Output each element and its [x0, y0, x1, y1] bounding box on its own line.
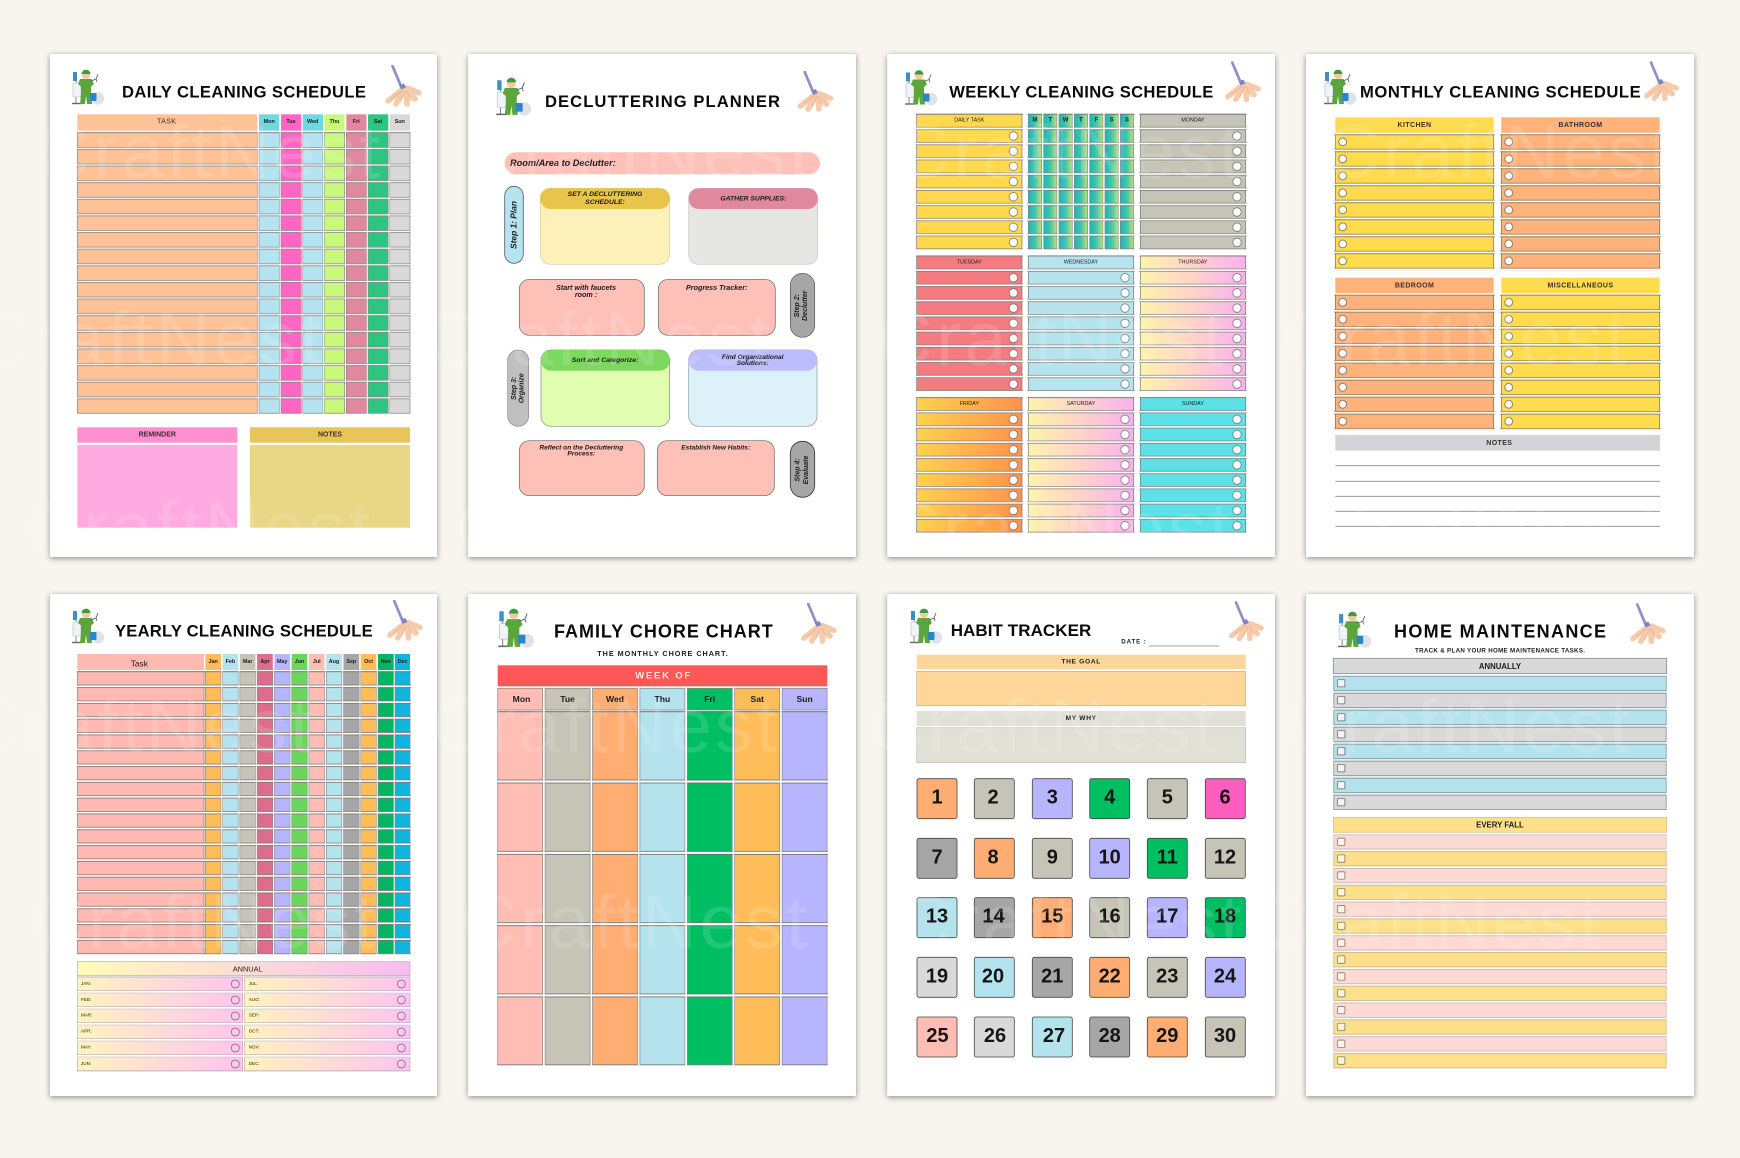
- monday column: [1139, 114, 1247, 250]
- title: home maintenance: HOME MAINTENANCE: [1394, 621, 1606, 641]
- habit day squares: 24: [1214, 965, 1237, 987]
- tuesday column: [916, 256, 1023, 392]
- habit day squares: 7: [931, 846, 943, 868]
- habit day squares: 13: [926, 906, 948, 928]
- task table: Wed: [307, 119, 318, 125]
- habit day squares: 23: [1156, 965, 1178, 987]
- watermark: CraftNest: [1255, 880, 1603, 965]
- date field: [1121, 638, 1219, 646]
- box: establish new habits: Establish New Habits:: [681, 444, 750, 451]
- annual checklist: JUL:: [249, 981, 258, 986]
- panel: decluttering planner: [468, 54, 856, 557]
- yearly task table: Jul: [313, 659, 321, 665]
- wednesday column: WEDNESDAY: [1064, 259, 1098, 265]
- annually checklist: [1333, 658, 1667, 810]
- icon: feather duster: [800, 72, 831, 109]
- thursday column: [1139, 256, 1247, 392]
- icon: cleaner mascot: [1338, 612, 1371, 648]
- notes box: NOTES: [318, 432, 342, 439]
- sunday column: SUNDAY: [1182, 401, 1204, 407]
- my why box: [917, 711, 1246, 763]
- yearly task table: Apr: [260, 659, 271, 665]
- box: reflect on the decluttering process: Process:: [567, 450, 595, 458]
- icon: cleaner mascot: [496, 78, 531, 116]
- chore grid: Mon: [513, 694, 530, 704]
- tuesday column: TUESDAY: [957, 259, 982, 265]
- annual checklist: MAY:: [81, 1045, 92, 1050]
- every fall checklist: [1333, 817, 1667, 1069]
- weekday check grid: W: [1063, 118, 1069, 124]
- chore grid: Sun: [796, 694, 813, 704]
- date field: DATE :: [1121, 638, 1146, 646]
- watermark: CraftNest: [432, 684, 780, 769]
- weekday check grid: M: [1032, 118, 1037, 124]
- watermark: CraftNest: [870, 684, 1218, 769]
- friday column: [916, 397, 1023, 534]
- panel: daily cleaning schedule: [50, 54, 437, 557]
- box: reflect on the decluttering process: Reflect on the Decluttering: [539, 444, 623, 451]
- habit day squares: 30: [1214, 1025, 1236, 1047]
- watermark: CraftNest: [465, 110, 813, 195]
- saturday column: SATURDAY: [1067, 401, 1096, 407]
- wednesday column: [1027, 256, 1135, 392]
- kitchen list: KITCHEN: [1398, 122, 1431, 129]
- yearly task table: Feb: [226, 659, 236, 665]
- notes section: [1335, 435, 1660, 526]
- watermark: [0, 110, 1673, 965]
- bedroom list: [1334, 278, 1495, 431]
- box: set a decluttering schedule: [540, 188, 670, 264]
- the goal box: [917, 655, 1246, 706]
- step 1 pill: Step 1: Plan: [509, 201, 519, 249]
- chore grid: Thu: [655, 694, 670, 704]
- yearly task table: Oct: [364, 659, 373, 665]
- box: start with faucets room: room :: [575, 290, 598, 299]
- watermark: CraftNest: [25, 487, 373, 572]
- habit day squares: 17: [1156, 906, 1178, 928]
- box: find organizational solutions: Find Organizational: [722, 354, 784, 361]
- panel: habit tracker: [887, 594, 1275, 1096]
- notes box: [250, 427, 410, 528]
- watermark: CraftNest: [895, 110, 1243, 195]
- room to declutter bar: Room/Area to Declutter:: [510, 158, 616, 168]
- step 4 pill: Evaluate: [803, 455, 810, 484]
- step 3 pill: [508, 350, 529, 426]
- step 2 pill: Declutter: [802, 289, 809, 321]
- watermark: CraftNest: [1282, 297, 1630, 382]
- yearly task table: Sep: [346, 659, 357, 665]
- panel: yearly cleaning schedule: [50, 594, 437, 1096]
- task table: Tue: [286, 119, 296, 125]
- watermark: CraftNest: [1325, 110, 1673, 195]
- yearly task table: Mar: [243, 659, 253, 665]
- yearly task table: Jun: [295, 659, 304, 665]
- step 4 pill: Step 4:: [794, 458, 802, 482]
- step 3 pill: Organize: [518, 373, 526, 403]
- yearly task table: Dec: [398, 659, 408, 665]
- habit day squares: 4: [1104, 787, 1116, 809]
- bathroom list: BATHROOM: [1559, 122, 1602, 129]
- icon: cleaner mascot: [72, 609, 104, 644]
- box: gather supplies: [689, 188, 818, 264]
- habit day squares: 6: [1219, 787, 1231, 809]
- title: habit tracker: HABIT TRACKER: [951, 621, 1091, 640]
- annual checklist: AUG:: [249, 997, 260, 1002]
- step 1 pill: [505, 186, 523, 263]
- step 2 pill: Step 2:: [794, 294, 801, 317]
- title: family chore chart: FAMILY CHORE CHART: [554, 622, 773, 642]
- daily task column: [916, 114, 1023, 250]
- the goal box: THE GOAL: [1061, 658, 1101, 666]
- icon: feather duster: [390, 601, 420, 638]
- weekday check grid: S: [1125, 118, 1129, 124]
- annual checklist: MAR:: [81, 1012, 92, 1018]
- box: progress tracker: Progress Tracker:: [686, 283, 748, 292]
- habit day squares: 28: [1099, 1025, 1121, 1047]
- icon: cleaner mascot: [1324, 70, 1356, 105]
- annual checklist: APR:: [81, 1029, 92, 1034]
- weekday check grid: T: [1048, 118, 1052, 124]
- habit day squares: 15: [1041, 906, 1063, 928]
- box: find organizational solutions: [689, 350, 817, 426]
- step 2 pill: [790, 273, 815, 337]
- sunday column: [1139, 397, 1247, 534]
- task table: TASK: [157, 119, 176, 126]
- habit day squares: 21: [1041, 965, 1063, 987]
- annual checklist: DEC:: [249, 1061, 260, 1066]
- chore grid: Fri: [704, 694, 715, 704]
- yearly task table: Task: [131, 658, 149, 668]
- monday column: MONDAY: [1181, 118, 1205, 124]
- habit day squares: 27: [1043, 1025, 1065, 1047]
- habit day squares: 5: [1162, 787, 1173, 809]
- watermark: CraftNest: [455, 487, 803, 572]
- habit day squares: 12: [1214, 846, 1236, 868]
- panel: family chore chart: [468, 594, 856, 1096]
- room to declutter bar: [505, 152, 820, 174]
- watermark: CraftNest: [1315, 487, 1663, 572]
- annual checklist: FEB:: [81, 997, 91, 1002]
- notes section: NOTES: [1486, 440, 1512, 447]
- habit day squares: 16: [1099, 906, 1121, 928]
- watermark: CraftNest: [878, 297, 1226, 382]
- week of banner: [498, 665, 827, 686]
- habit day squares: 11: [1157, 846, 1178, 868]
- task table: Sat: [374, 119, 382, 125]
- box: sort and categorize: Sort and Categorize:: [572, 357, 638, 364]
- title: decluttering planner: DECLUTTERING PLANNER: [545, 92, 780, 111]
- reminder box: REMINDER: [139, 432, 176, 439]
- icon: cleaner mascot: [910, 609, 942, 644]
- subtitle: TRACK & PLAN YOUR HOME MAINTENANCE TASKS.: [1415, 647, 1585, 654]
- icon: cleaner mascot: [498, 609, 534, 648]
- task table: Thu: [330, 119, 339, 125]
- box: sort and categorize: [541, 350, 670, 426]
- thursday column: THURSDAY: [1178, 259, 1208, 265]
- annually checklist: ANNUALLY: [1479, 662, 1522, 671]
- habit day squares: 20: [982, 965, 1004, 987]
- annual checklist: SEP:: [249, 1012, 259, 1018]
- habit day squares: 22: [1099, 965, 1121, 987]
- annual checklist: JUN:: [81, 1061, 91, 1066]
- weekday check grid: T: [1079, 118, 1083, 124]
- friday column: FRIDAY: [960, 401, 979, 407]
- bedroom list: BEDROOM: [1395, 282, 1434, 289]
- yearly task table: Jan: [209, 659, 218, 665]
- watermark: CraftNest: [425, 297, 773, 382]
- habit day squares: 26: [984, 1025, 1006, 1047]
- habit day squares: 10: [1099, 846, 1121, 868]
- icon: feather duster: [1232, 603, 1261, 639]
- box: progress tracker: [658, 279, 775, 335]
- task table: Mon: [264, 119, 275, 125]
- icon: feather duster: [804, 604, 834, 641]
- my why box: MY WHY: [1066, 715, 1097, 722]
- subtitle: THE MONTHLY CHORE CHART.: [597, 649, 728, 658]
- step 3 pill: Step 3:: [511, 377, 518, 400]
- title: daily cleaning schedule: DAILY CLEANING SCHEDULE: [122, 82, 366, 101]
- box: find organizational solutions: Solutions:: [737, 360, 769, 367]
- week of banner: WEEK OF: [635, 670, 690, 681]
- miscellaneous list: [1500, 278, 1661, 431]
- chore grid: [497, 688, 828, 1066]
- icon: cleaner mascot: [72, 70, 104, 105]
- every fall checklist: EVERY FALL: [1476, 821, 1524, 830]
- miscellaneous list: MISCELLANEOUS: [1548, 282, 1613, 289]
- watermark: CraftNest: [885, 487, 1233, 572]
- box: set a decluttering schedule: SET A DECLUTTERING: [568, 191, 643, 198]
- chore grid: Sat: [751, 694, 764, 704]
- habit day squares: [917, 779, 1245, 1057]
- habit day squares: 8: [987, 846, 999, 868]
- task table: [77, 114, 410, 414]
- icon: feather duster: [388, 66, 419, 104]
- yearly task table: [77, 654, 411, 955]
- annual checklist: OCT:: [249, 1029, 259, 1034]
- annual checklist: JAN:: [81, 981, 91, 986]
- annual checklist: ANNUAL: [233, 964, 263, 973]
- title: monthly cleaning schedule: MONTHLY CLEANING SCHEDULE: [1360, 82, 1641, 101]
- title: weekly cleaning schedule: WEEKLY CLEANING SCHEDULE: [949, 82, 1213, 101]
- panel: home maintenance: [1306, 594, 1694, 1096]
- weekday check grid: S: [1110, 118, 1114, 124]
- habit day squares: 9: [1047, 846, 1058, 868]
- saturday column: [1027, 397, 1135, 534]
- box: set a decluttering schedule: SCHEDULE:: [585, 199, 625, 206]
- panel: weekly cleaning schedule: [887, 54, 1275, 557]
- bathroom list: [1500, 117, 1661, 270]
- box: start with faucets room: [519, 279, 644, 335]
- habit day squares: 14: [982, 906, 1005, 928]
- icon: cleaner mascot: [905, 70, 937, 105]
- task table: Sun: [395, 119, 405, 125]
- chore grid: Tue: [560, 694, 575, 704]
- watermark: CraftNest: [30, 880, 378, 965]
- chore grid: Wed: [606, 694, 624, 704]
- yearly task table: Aug: [329, 659, 339, 665]
- weekday check grid: F: [1094, 118, 1098, 124]
- icon: feather duster: [1228, 63, 1258, 100]
- yearly task table: May: [277, 659, 287, 665]
- daily task column: DAILY TASK: [954, 118, 985, 124]
- watermark: CraftNest: [896, 880, 1244, 965]
- watermark: CraftNest: [462, 880, 810, 965]
- reminder box: [77, 427, 237, 528]
- title: yearly cleaning schedule: YEARLY CLEANING SCHEDULE: [115, 622, 373, 641]
- habit day squares: 3: [1047, 787, 1058, 809]
- annual checklist: NOV:: [249, 1045, 260, 1050]
- habit day squares: 2: [987, 787, 999, 809]
- habit day squares: 29: [1156, 1025, 1178, 1047]
- yearly task table: Nov: [381, 659, 391, 665]
- weekday check grid: [1027, 114, 1135, 250]
- watermark: CraftNest: [35, 110, 383, 195]
- task table: Fri: [353, 119, 360, 125]
- step 4 pill: [790, 441, 815, 497]
- icon: feather duster: [1633, 605, 1663, 642]
- kitchen list: [1334, 117, 1495, 270]
- habit day squares: 1: [931, 787, 943, 809]
- habit day squares: 25: [926, 1025, 949, 1047]
- habit day squares: 19: [926, 965, 948, 987]
- box: start with faucets room: Start with faucets: [556, 283, 616, 292]
- habit day squares: 18: [1214, 906, 1236, 928]
- icon: feather duster: [1647, 63, 1676, 99]
- box: reflect on the decluttering process: [519, 441, 644, 496]
- annual checklist: [76, 962, 411, 1072]
- watermark: CraftNest: [1285, 684, 1633, 769]
- panel: monthly cleaning schedule: [1306, 54, 1694, 557]
- box: gather supplies: GATHER SUPPLIES:: [720, 195, 786, 202]
- box: establish new habits: [657, 441, 774, 496]
